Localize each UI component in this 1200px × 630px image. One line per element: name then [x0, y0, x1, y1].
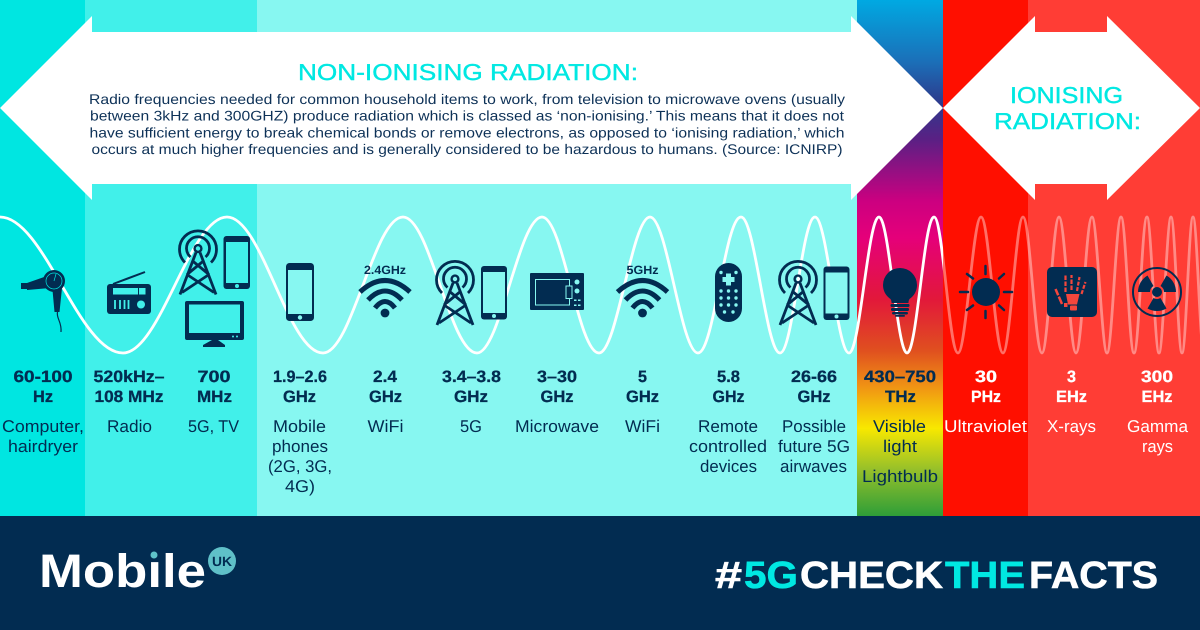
column: 2.4 GHz: WiFi	[368, 417, 404, 436]
icon: microwave	[530, 273, 584, 310]
column: 1.9-2.6 GHz: (2G, 3G,	[268, 457, 332, 476]
hashtag: #5GCHECKTHEFACTS: #	[715, 555, 742, 597]
column: 430-750 THz: Lightbulb	[862, 467, 938, 486]
column: 300 EHz: 300	[1141, 368, 1173, 386]
logo: Mobile UK: Mobile	[39, 544, 206, 597]
column: 26-66 GHz: future 5G	[778, 437, 850, 456]
icon: 5G tower	[180, 231, 216, 294]
column: 5.8 GHz: Remote	[698, 417, 758, 436]
icon: remote control	[715, 263, 742, 322]
column: 5 GHz	[618, 263, 668, 436]
column: 520 kHz to 108 MHz: 108 MHz	[94, 388, 164, 406]
column: 700 MHz	[180, 231, 250, 436]
heading: ionising radiation: RADIATION:	[994, 108, 1141, 134]
hashtag: #5GCHECKTHEFACTS: THE	[945, 555, 1025, 597]
column: 60-100 Hz: Hz	[33, 388, 53, 406]
text block: non-ionising explanation	[89, 91, 845, 157]
icon: hairdryer	[21, 270, 65, 332]
panel: visible light column	[857, 0, 943, 516]
column: 3.4-3.8 GHz	[436, 261, 507, 436]
panel: X-ray and gamma columns	[1028, 0, 1200, 516]
column: 5 GHz: 5	[638, 368, 647, 386]
column: 26-66 GHz	[778, 261, 850, 476]
icon: sun	[960, 266, 1012, 318]
column: 3 EHz: X-rays	[1047, 417, 1096, 436]
column: 60-100 Hz: 60-100	[14, 368, 72, 386]
column: 60-100 Hz: Computer,	[2, 417, 84, 436]
icon: phone	[481, 266, 507, 320]
column: 26-66 GHz: airwaves	[780, 457, 847, 476]
icon: 5G tower	[780, 261, 816, 325]
column: 60-100 Hz	[2, 270, 84, 456]
panel: radio and 700 MHz columns	[85, 0, 257, 516]
column: 3.4-3.8 GHz: 3.4–3.8	[442, 368, 501, 386]
column: 520 kHz to 108 MHz: 520kHz–	[94, 368, 164, 386]
column: 430-750 THz: light	[883, 437, 917, 456]
column: 1.9-2.6 GHz: 1.9–2.6	[273, 368, 327, 386]
wave: ionising section	[943, 216, 1200, 354]
column: 1.9-2.6 GHz	[268, 263, 332, 496]
panel: GHz columns	[257, 0, 857, 516]
column: 5 GHz: GHz	[626, 388, 659, 406]
column: 5 GHz: WiFi	[625, 417, 660, 436]
column: 3-30 GHz: 3–30	[537, 368, 577, 386]
column: 30 PHz: 30	[975, 368, 997, 386]
column: 60-100 Hz: hairdryer	[8, 437, 78, 456]
text block: non-ionising explanation: between 3kHz and 300GHZ) produce radiation which is classed as ‘non-ionising.’ This means that it does not	[90, 108, 844, 124]
arrow: ionising radiation range	[943, 16, 1200, 200]
column: 3 EHz: 3	[1067, 368, 1076, 386]
column: 30 PHz: PHz	[971, 388, 1001, 406]
icon: lightbulb	[883, 268, 917, 317]
column: 26-66 GHz: 26-66	[791, 368, 837, 386]
column: 5.8 GHz	[689, 263, 767, 476]
column: 1.9-2.6 GHz: GHz	[283, 388, 316, 406]
hashtag: #5GCHECKTHEFACTS: CHECK	[800, 555, 944, 597]
arrow: non-ionising radiation range	[0, 16, 943, 200]
icon: mobile phone	[286, 263, 314, 321]
column: 2.4 GHz	[360, 263, 410, 436]
column: 3-30 GHz: GHz	[540, 388, 574, 406]
column: 3.4-3.8 GHz: 5G	[460, 417, 482, 436]
column: 1.9-2.6 GHz: Mobile	[273, 417, 326, 436]
hashtag: #5GCHECKTHEFACTS: 5G	[744, 555, 798, 597]
icon: wifi 2.4GHz	[360, 263, 410, 317]
column: 30 PHz	[944, 266, 1027, 436]
column: 3 EHz: EHz	[1056, 388, 1087, 406]
column: 430-750 THz: Visible	[873, 417, 926, 436]
column: 430-750 THz: THz	[885, 388, 916, 406]
column: 3 EHz	[1047, 267, 1097, 436]
column: 26-66 GHz: Possible	[782, 417, 846, 436]
column: 520 kHz to 108 MHz	[94, 272, 164, 436]
hashtag: #5GCHECKTHEFACTS	[715, 555, 1158, 597]
column: 1.9-2.6 GHz: phones	[272, 437, 328, 456]
footer band	[0, 516, 1200, 630]
wave: non-ionising section	[0, 216, 943, 354]
column: 2.4 GHz: 2.4	[373, 368, 398, 386]
icon: radiation symbol	[1133, 268, 1181, 316]
column: 3-30 GHz: Microwave	[515, 417, 599, 436]
column: 700 MHz: 5G, TV	[188, 417, 240, 436]
column: 300 EHz: rays	[1142, 437, 1173, 456]
column: 700 MHz: 700	[198, 368, 230, 386]
column: 26-66 GHz: GHz	[798, 388, 830, 406]
column: 3.4-3.8 GHz: GHz	[454, 388, 488, 406]
text block: non-ionising explanation: occurs at much higher frequencies and is generally considered to be hazardous to humans. (Source: ICNIRP)	[92, 141, 842, 157]
icon: X-ray hand	[1047, 267, 1097, 317]
heading: ionising radiation	[994, 82, 1141, 134]
icon: phone	[824, 266, 850, 320]
panel: extremely low frequency column	[0, 0, 85, 516]
logo: Mobile UK: UK	[212, 554, 232, 569]
column: 700 MHz: MHz	[197, 388, 232, 406]
column: 1.9-2.6 GHz: 4G)	[285, 477, 315, 496]
column: 520 kHz to 108 MHz: Radio	[107, 417, 152, 436]
column: 5.8 GHz: 5.8	[717, 368, 740, 386]
text block: non-ionising explanation: Radio frequencies needed for common household items to work, from television to microwave ovens (usually	[89, 91, 845, 107]
text block: non-ionising explanation: have sufficient energy to break chemical bonds or remove electrons, as opposed to ‘ionising radiation,’ which	[90, 124, 845, 140]
column: 300 EHz: EHz	[1142, 388, 1172, 406]
heading: non-ionising radiation: NON-IONISING RADIATION:	[298, 59, 638, 85]
icon: wifi 5GHz	[618, 263, 668, 317]
column: 3-30 GHz	[515, 273, 599, 436]
icon: 5G tower	[436, 261, 474, 325]
icon: wifi 2.4GHz: 2.4GHz	[364, 263, 406, 277]
hashtag: #5GCHECKTHEFACTS: FACTS	[1029, 555, 1158, 597]
panel: ultraviolet column	[943, 0, 1028, 516]
column: 2.4 GHz: GHz	[369, 388, 402, 406]
icon: wifi 5GHz: 5GHz	[626, 263, 658, 277]
icon: phone	[224, 236, 250, 289]
column: 5.8 GHz: devices	[700, 457, 757, 476]
icon: television	[185, 301, 244, 347]
heading: ionising radiation: IONISING	[1010, 82, 1123, 108]
column: 300 EHz: Gamma	[1127, 417, 1189, 436]
column: 430-750 THz: 430–750	[864, 368, 936, 386]
column: 30 PHz: Ultraviolet	[944, 417, 1027, 436]
column: 5.8 GHz: GHz	[712, 388, 744, 406]
icon: radio	[107, 272, 151, 314]
column: 430-750 THz	[862, 268, 938, 486]
column: 300 EHz	[1127, 268, 1189, 456]
column: 5.8 GHz: controlled	[689, 437, 767, 456]
